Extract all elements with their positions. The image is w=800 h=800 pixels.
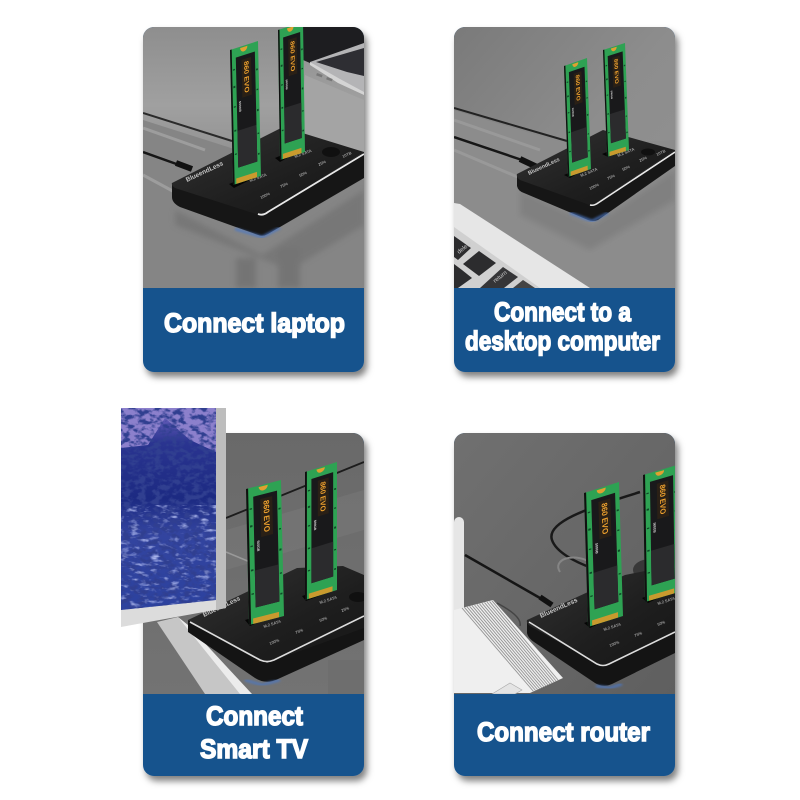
SSD right: 860 EVO	[319, 480, 328, 513]
TV monitor	[121, 408, 226, 627]
caption: Connect	[206, 701, 303, 731]
SSD right: 500GB	[313, 519, 317, 531]
dock	[517, 130, 675, 221]
SSD left	[230, 41, 261, 185]
caption: Smart TV	[200, 734, 308, 764]
dock: BlueendLess	[202, 595, 242, 619]
cables	[454, 108, 567, 167]
photo: dock with router	[454, 433, 679, 694]
SSD left: 500GB	[256, 540, 260, 552]
dock: 100%	[259, 191, 271, 200]
dock reflection	[522, 176, 674, 247]
router	[454, 517, 563, 694]
SSD left: 860 EVO	[600, 501, 610, 536]
dock	[527, 565, 676, 688]
SSD left: 860 EVO	[574, 74, 580, 102]
dock: 75%	[606, 173, 616, 181]
dock: 100%	[588, 182, 600, 191]
SSD left	[584, 482, 623, 627]
caption	[465, 297, 660, 356]
SSD right: 860 EVO	[612, 58, 619, 85]
panel: connect router	[454, 433, 679, 776]
photo: dock with TV stand	[143, 433, 367, 694]
dock: BlueendLess	[185, 160, 225, 184]
SSD right	[305, 462, 337, 600]
dock: 75%	[634, 630, 643, 638]
dock	[172, 127, 364, 237]
dock: M.2 SATA	[580, 166, 598, 178]
laptop keyboard	[454, 203, 590, 288]
SSD left: 500GB	[238, 101, 242, 113]
SSD right: 860 EVO	[289, 40, 295, 73]
cables	[226, 462, 364, 562]
dock: BlueendLess	[539, 597, 579, 620]
card 4 base and shadow	[454, 433, 675, 776]
dock: M.2 SATA	[319, 595, 338, 605]
TV stand	[157, 617, 247, 694]
laptop	[303, 27, 364, 95]
laptop keyboard: return	[493, 270, 509, 285]
dock: M.2 SATA	[617, 146, 635, 158]
dock	[188, 566, 367, 694]
dock reflection	[175, 190, 364, 288]
caption	[200, 701, 308, 764]
dock: 25%	[638, 155, 648, 163]
laptop keyboard: delete	[457, 240, 474, 256]
dock: M.2 SATA	[294, 148, 312, 159]
dock: 50%	[298, 170, 308, 178]
SSD left	[564, 58, 591, 177]
dock: 50%	[621, 164, 631, 172]
dock: 50%	[319, 615, 328, 623]
card 1 base and shadow	[143, 27, 364, 372]
dock: 100%	[269, 637, 280, 646]
caption: desktop computer	[465, 326, 660, 356]
card 2 base and shadow	[454, 27, 675, 372]
dock: 10TB	[655, 148, 666, 157]
dock: 75%	[295, 627, 304, 635]
dock: 25%	[317, 159, 327, 167]
dock: 100%	[609, 639, 620, 648]
SSD left: 500GB	[571, 107, 575, 117]
SSD right	[603, 43, 629, 157]
SSD left	[246, 480, 284, 625]
dock: BlueendLess	[527, 157, 561, 177]
dock: 25%	[341, 605, 350, 613]
SSD right: 500GB	[610, 90, 613, 100]
SSD right	[643, 466, 675, 602]
caption: Connect router	[477, 717, 650, 747]
SSD left: 860 EVO	[262, 499, 271, 533]
SSD right: 860 EVO	[658, 483, 667, 515]
SSD left: 500GB	[594, 543, 599, 555]
caption: Connect laptop	[164, 308, 345, 338]
caption: Connect to a	[494, 297, 632, 327]
panel: connect to a desktop computer	[454, 27, 675, 372]
photo: dock with keyboard	[454, 27, 675, 288]
dock: 75%	[279, 181, 289, 189]
SSD right	[278, 22, 305, 160]
panel: connect laptop	[143, 22, 364, 372]
dock: M.2 SATA	[603, 622, 622, 632]
dock: M.2 SATA	[657, 596, 676, 606]
SSD right: 500GB	[652, 522, 657, 534]
dock: M.2 SATA	[263, 619, 282, 629]
SSD left: 860 EVO	[242, 60, 251, 94]
cables	[143, 113, 232, 195]
panel: connect smart TV	[121, 408, 367, 776]
photo: dock with laptop	[143, 22, 364, 288]
dock: 10TB	[341, 150, 352, 159]
dock: M.2 SATA	[249, 172, 267, 183]
dock: 50%	[657, 619, 666, 627]
SSD right: 500GB	[285, 79, 288, 90]
cables	[465, 492, 640, 605]
card 3 base and shadow	[143, 433, 364, 776]
